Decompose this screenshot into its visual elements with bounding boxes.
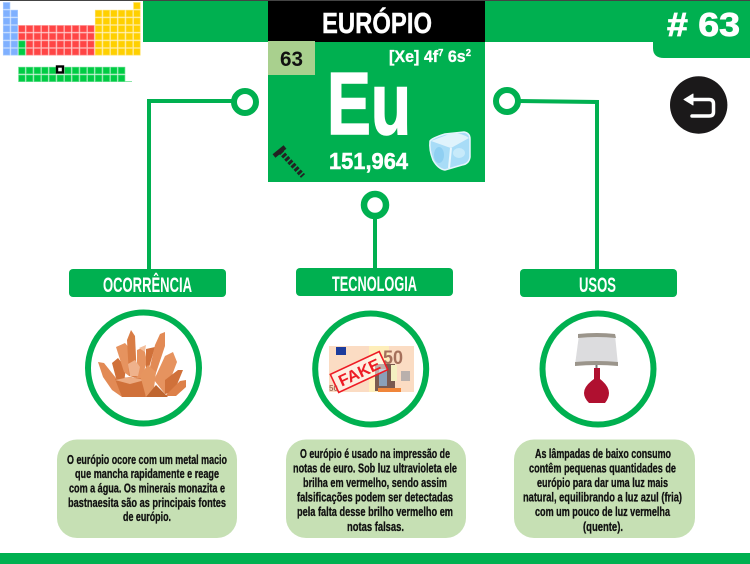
element title [268, 1, 485, 42]
electron configuration: 6s [443, 47, 466, 66]
back button [670, 76, 727, 134]
atomic number tab [653, 1, 750, 58]
periodic table thumbnail [3, 2, 140, 82]
icon: fake euro note: 50 [329, 384, 338, 393]
text block: tecnologia: notas falsas. [347, 520, 404, 534]
text block: tecnologia: pela falta desse brilho vermelho em [297, 505, 453, 519]
text block: usos: (quente). [583, 520, 623, 534]
text block: usos: európio para dar uma luz mais [537, 476, 668, 490]
text block: tecnologia: notas de euro. Sob luz ultravioleta ele [293, 462, 457, 476]
text block: tecnologia: O európio é usado na impressão de [300, 447, 450, 461]
atomic number: 63 [280, 48, 303, 71]
heading: ocorrencia [69, 269, 226, 297]
top green band left [143, 1, 268, 42]
heading: tecnologia: TECNOLOGIA [332, 273, 417, 296]
text block: usos: contêm pequenas quantidades de [529, 462, 676, 476]
icon circle: banknote [315, 314, 426, 424]
atomic number [268, 41, 315, 75]
electron configuration: 2 [466, 48, 471, 59]
heading: tecnologia [296, 268, 453, 296]
text block: ocorrencia: que mancha rapidamente e reage [75, 467, 219, 481]
icon: table lamp [575, 333, 618, 403]
connector: left [149, 91, 256, 270]
text block: tecnologia: falsificações podem ser detectadas [297, 490, 453, 504]
icon: fake euro note [329, 346, 414, 393]
text block: usos: natural, equilibrando a luz azul (fria) [523, 490, 682, 504]
icon: fake euro note: FAKE [336, 356, 383, 390]
electron configuration: [Xe] 4f [389, 47, 441, 66]
icon circle: crystals [88, 312, 199, 424]
heading: usos [520, 269, 677, 297]
icon: fake euro note: 50 [383, 348, 403, 369]
heading: ocorrencia: OCORRÊNCIA [103, 273, 192, 297]
electron configuration: 7 [438, 48, 444, 59]
top green band right [485, 1, 655, 42]
bottom band [0, 553, 750, 564]
icon: ice cube [430, 132, 470, 170]
text block: usos: com um pouco de luz vermelha [535, 505, 671, 519]
element card [268, 41, 485, 182]
icon: screw [274, 147, 303, 176]
text block: ocorrencia: de európio. [123, 510, 171, 524]
icon circle: lamp [542, 314, 654, 424]
text block: usos [514, 440, 695, 538]
icon: orange crystals [98, 330, 186, 397]
text block: ocorrencia: com a água. Os minerais monazita e [69, 482, 225, 496]
text block: tecnologia [286, 440, 466, 538]
text block: ocorrencia: bastnaesita são as principais fontes [68, 496, 226, 510]
text block: tecnologia: brilha em vermelho, sendo assim [303, 476, 447, 490]
atomic mass: 151,964 [329, 148, 408, 174]
heading: usos: USOS [579, 274, 616, 297]
text block: ocorrencia [57, 440, 237, 538]
atomic number tab: # 63 [667, 6, 740, 43]
connector: centre [364, 194, 386, 269]
connector: right [496, 90, 597, 270]
element symbol: Eu [327, 54, 411, 153]
text block: ocorrencia: O európio ocore com um metal macio [67, 453, 227, 467]
element title: EURÓPIO [322, 6, 432, 40]
text block: usos: As lâmpadas de baixo consumo [535, 447, 671, 461]
